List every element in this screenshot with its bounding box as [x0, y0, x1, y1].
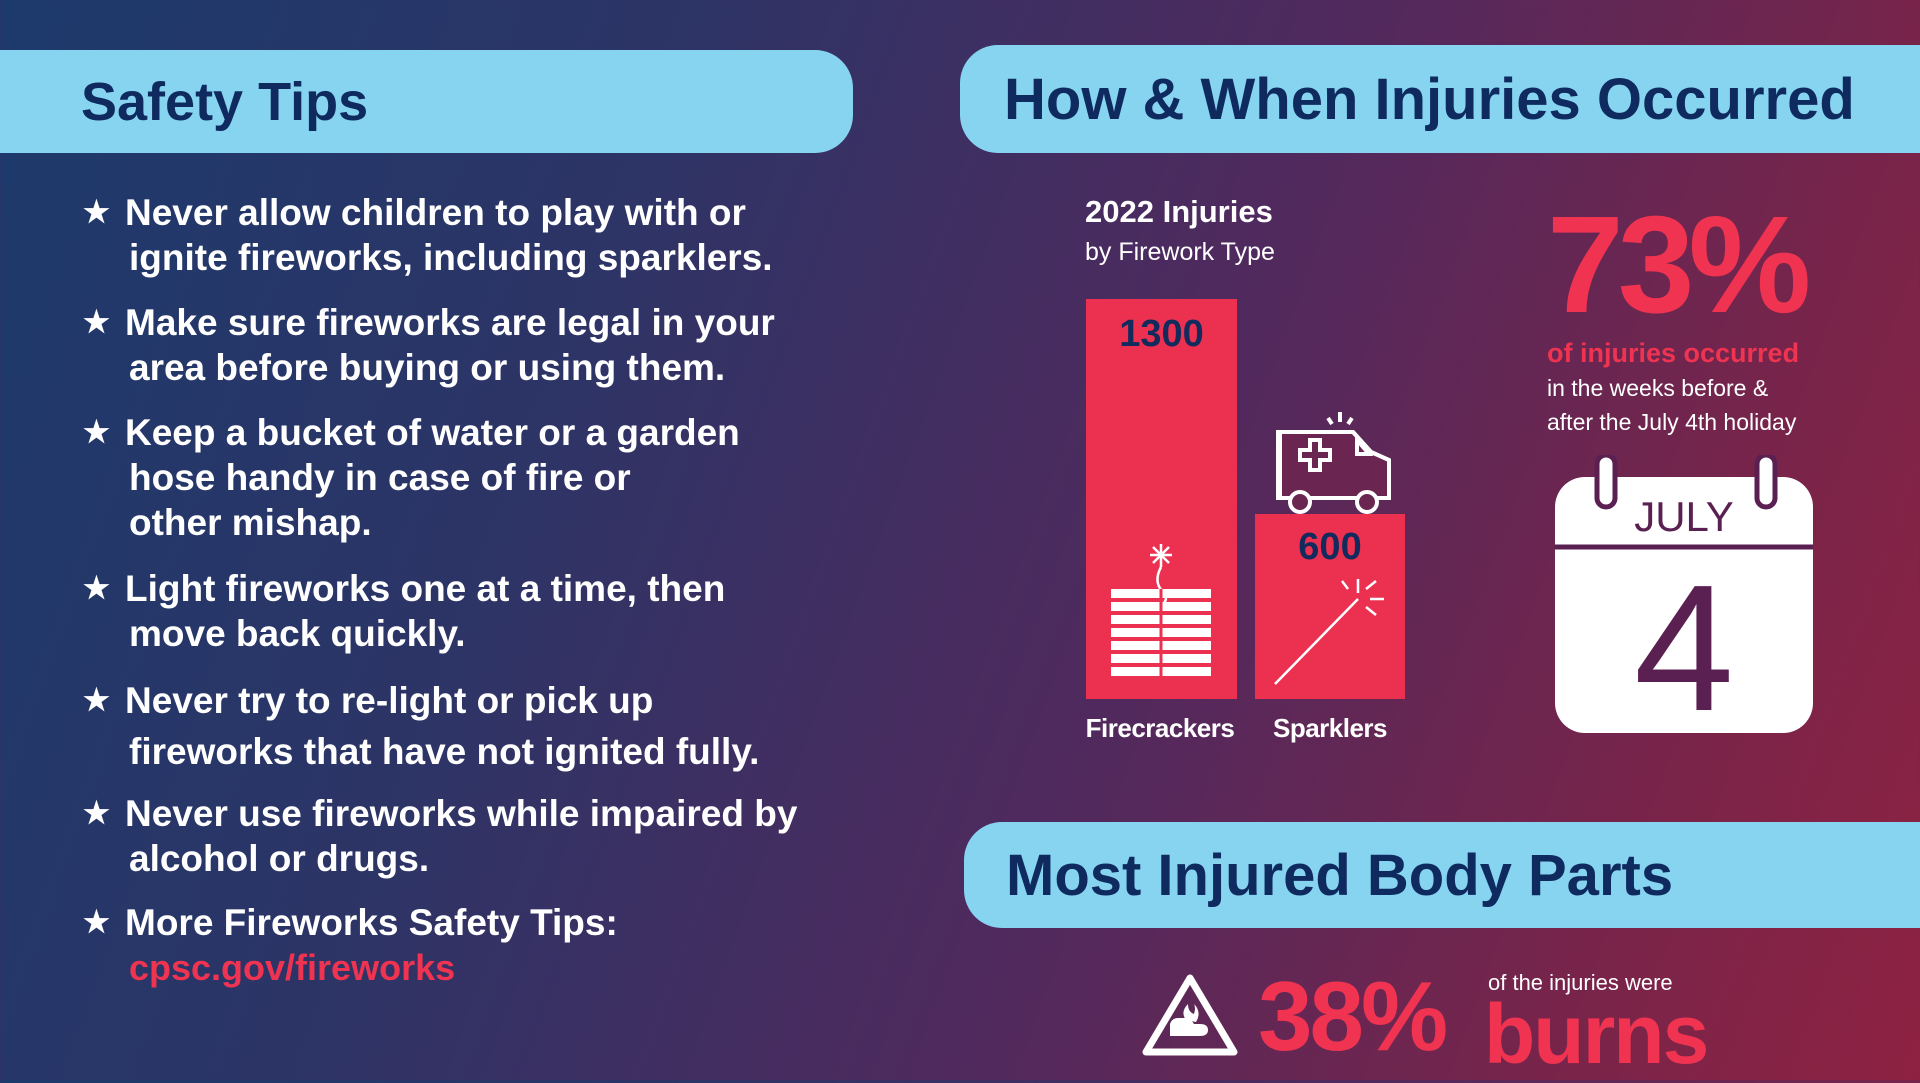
stat: 38% burns: 38% [1258, 961, 1445, 1071]
bar: sparklers: 600 [1298, 526, 1362, 568]
tip 7: More Fireworks Safety Tips: [125, 902, 618, 943]
tip 5: fireworks that have not ignited fully. [129, 731, 759, 772]
label: sparklers: Sparklers [1273, 713, 1387, 743]
tip 1: ★ [83, 196, 110, 229]
stat: 73% [1547, 188, 1808, 435]
tip 6: alcohol or drugs. [129, 838, 429, 879]
tip 4: ★ [83, 572, 110, 605]
icon: ambulance [1276, 412, 1391, 514]
tip 5: ★ [83, 684, 110, 717]
icon: calendar july 4 [1555, 455, 1813, 735]
icon: burn hand warning [1142, 974, 1238, 1056]
tip 2: area before buying or using them. [129, 347, 725, 388]
banner: body parts: Most Injured Body Parts [1006, 842, 1673, 908]
bar: firecrackers: 1300 [1119, 313, 1204, 355]
label: firecrackers: Firecrackers [1086, 713, 1234, 743]
tip 6: Never use fireworks while impaired by [125, 793, 797, 834]
stat: 73%: after the July 4th holiday [1547, 409, 1796, 435]
icon: sparkler [1274, 579, 1384, 685]
stat: 38% burns: burns [1484, 987, 1707, 1081]
tip 1 [83, 192, 773, 278]
bar chart [1086, 299, 1405, 743]
tip 3 [83, 412, 740, 543]
icon: calendar july 4: JULY [1634, 493, 1734, 540]
tip 7: cpsc.gov/fireworks [129, 947, 455, 988]
bar: sparklers [1255, 514, 1405, 699]
tip 6 [83, 793, 798, 879]
tip 2: Make sure fireworks are legal in your [125, 302, 775, 343]
banner: safety tips: Safety Tips [81, 72, 368, 132]
bar: firecrackers [1086, 299, 1237, 699]
stat: 73%: of injuries occurred [1547, 338, 1799, 368]
tip 6: ★ [83, 797, 110, 830]
tips list [83, 192, 798, 988]
tip 7: ★ [83, 906, 110, 939]
banner: how & when: How & When Injuries Occurred [1004, 66, 1855, 132]
tip 2 [83, 302, 775, 388]
tip 1: ignite fireworks, including sparklers. [129, 237, 773, 278]
stat: 73%: 73% [1547, 188, 1805, 342]
chart heading [1085, 194, 1275, 266]
tip 1: Never allow children to play with or [125, 192, 746, 233]
tip 7 [83, 902, 618, 988]
tip 5: Never try to re-light or pick up [125, 680, 653, 721]
icon: firecracker bundle [1111, 544, 1211, 676]
tip 3: ★ [83, 416, 110, 449]
banner: safety tips [0, 50, 853, 153]
stat: 73%: in the weeks before & [1547, 375, 1768, 401]
stat: 38% burns: of the injuries were [1488, 970, 1673, 995]
tip 5 [83, 680, 759, 772]
tip 4 [83, 568, 725, 654]
banner: body parts [964, 822, 1920, 928]
tip 2: ★ [83, 306, 110, 339]
tip 3: other mishap. [129, 502, 372, 543]
tip 4: Light fireworks one at a time, then [125, 568, 725, 609]
banner: how & when [960, 45, 1920, 153]
tip 3: hose handy in case of fire or [129, 457, 631, 498]
stat: 38% burns [1258, 961, 1707, 1081]
chart heading: 2022 Injuries [1085, 194, 1273, 229]
tip 4: move back quickly. [129, 613, 466, 654]
chart heading: by Firework Type [1085, 238, 1275, 266]
tip 3: Keep a bucket of water or a garden [125, 412, 740, 453]
